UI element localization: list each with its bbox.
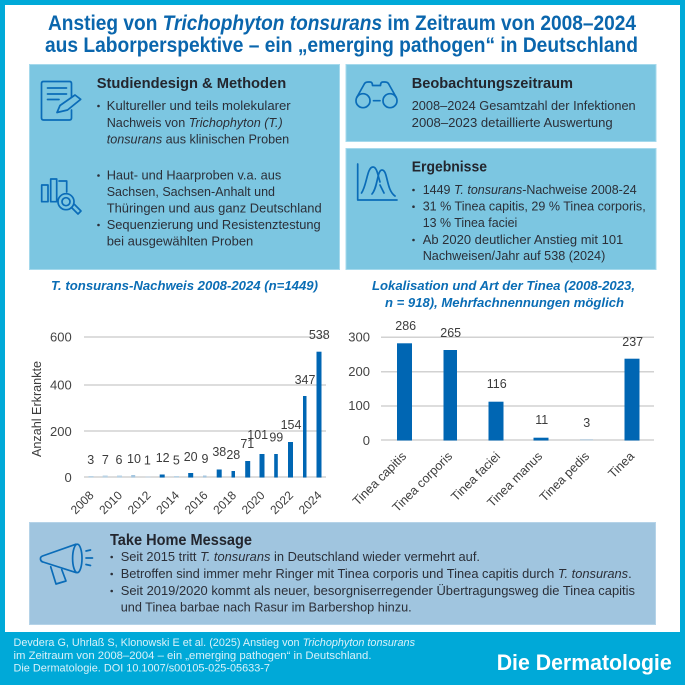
bar chart: yearly detections	[30, 328, 330, 517]
data labels: 101	[247, 428, 268, 442]
x axis labels: 2018	[210, 488, 239, 517]
x axis labels: Tinea	[605, 449, 637, 481]
text block: results list: Ab 2020 deutlicher Anstieg mit 101	[423, 232, 623, 247]
text block: methods list: Sequenzierung und Resistenztestung	[107, 217, 321, 232]
y axis labels: 0	[64, 470, 72, 485]
bars	[397, 343, 640, 440]
panel: Studiendesign und Methoden	[30, 64, 340, 270]
x axis labels: 2020	[239, 488, 268, 517]
data labels: 538	[309, 328, 330, 342]
data labels: 28	[226, 448, 240, 462]
heading: Studiendesign und Methoden: Studiendesign & Methoden	[97, 75, 286, 92]
data labels: 3	[583, 416, 590, 430]
data labels: 71	[240, 437, 254, 451]
chart title: Lokalisation und Art der Tinea	[372, 278, 635, 310]
bars	[88, 352, 322, 478]
icon: document with pencil	[42, 82, 81, 120]
x axis labels: 2010	[96, 488, 125, 517]
text block: results list: Nachweisen/Jahr auf 538 (2024)	[423, 248, 605, 263]
data labels: 9	[202, 452, 209, 466]
y axis labels: 300	[348, 330, 370, 345]
bar chart: tinea localisation	[348, 319, 654, 515]
y axis labels: 400	[50, 378, 72, 392]
icon: distribution curves	[358, 164, 397, 200]
icon: megaphone	[40, 544, 92, 584]
data labels: 286	[395, 319, 416, 333]
text block: key messages: Betroffen sind immer mehr Ringer mit Tinea corporis und Tinea capitis durch T. tonsurans.	[121, 566, 632, 581]
text block: key messages	[110, 549, 635, 615]
panel: Beobachtungszeitraum	[346, 64, 656, 142]
icon: binoculars	[356, 82, 397, 108]
text block: methods list: Kultureller und teils molekularer	[107, 98, 291, 113]
text block: results list: 1449 T. tonsurans-Nachweise 2008-24	[423, 182, 637, 197]
text block: methods list: tonsurans aus klinischen Proben	[107, 132, 289, 146]
text block: observation period: 2008–2024 Gesamtzahl der Infektionen	[412, 98, 636, 113]
panel: Take Home Message	[30, 522, 656, 624]
data labels	[395, 319, 643, 430]
x axis labels: 2008	[68, 488, 97, 517]
data labels: 20	[184, 450, 198, 464]
text block: methods list: Haut- und Haarproben v.a. aus	[107, 168, 282, 182]
y axis title: Anzahl Erkrankte	[30, 361, 44, 457]
data labels: 6	[116, 453, 123, 467]
x axis labels: 2014	[153, 488, 182, 517]
data labels: 12	[156, 451, 170, 465]
x axis labels: 2022	[267, 488, 296, 517]
icon: bar chart with magnifier	[42, 179, 81, 214]
y axis labels: 200	[348, 364, 370, 379]
text block: results list: 31 % Tinea capitis, 29 % Tinea corporis,	[423, 199, 646, 214]
citation: im Zeitraum von 2008–2004 – ein „emerging pathogen“ in Deutschland.	[14, 650, 372, 662]
y axis labels: 0	[363, 433, 370, 448]
y axis labels: 200	[50, 424, 72, 439]
text block: key messages: Seit 2019/2020 kommt als neuer, besorgniserregender Übertragungsweg die Tinea capitis	[121, 583, 635, 598]
chart title: T. tonsurans-Nachweis: T. tonsurans-Nachweis 2008-2024 (n=1449)	[51, 278, 318, 293]
x axis labels	[68, 488, 325, 517]
data labels: 265	[440, 326, 461, 340]
data labels: 1	[144, 454, 151, 468]
data labels: 7	[102, 453, 109, 467]
text block: key messages: und Tinea barbae nach Rasur im Barbershop hinzu.	[121, 600, 412, 615]
text block: methods list: Sachsen, Sachsen-Anhalt und	[107, 184, 275, 199]
text block: results list	[412, 182, 646, 263]
data labels: 3	[87, 453, 94, 467]
citation: Devdera G, Uhrlaß S, Klonowski E et al. (2025) Anstieg von Trichophyton tonsurans	[14, 637, 415, 649]
y axis labels: 600	[50, 330, 72, 345]
x axis labels: 2016	[182, 488, 211, 517]
text block: methods list: Thüringen und aus ganz Deutschland	[107, 200, 322, 216]
data labels: 5	[173, 454, 180, 468]
x axis labels: Tinea pedis	[537, 449, 592, 504]
x axis labels: 2024	[296, 488, 325, 517]
data labels: 116	[487, 377, 507, 391]
data labels: 237	[622, 335, 643, 349]
y axis labels	[50, 330, 72, 485]
text block: methods list	[97, 98, 322, 248]
data labels: 10	[127, 452, 141, 466]
title: Anstieg von Trichophyton tonsurans im Zeitraum von 2008–2024	[48, 12, 636, 35]
heading: Ergebnisse: Ergebnisse	[412, 159, 487, 176]
data labels	[87, 328, 330, 468]
y axis labels	[348, 330, 370, 448]
chart title: Lokalisation und Art der Tinea: Lokalisation und Art der Tinea (2008-2023,	[372, 278, 635, 293]
title	[45, 12, 638, 57]
journal name: Die Dermatologie	[497, 650, 672, 675]
x axis labels: Tinea manus	[484, 449, 545, 510]
text block: methods list: Nachweis von Trichophyton (T.)	[107, 115, 283, 130]
x axis labels: Tinea corporis	[390, 449, 455, 515]
x axis labels: Tinea faciei	[448, 449, 503, 504]
title: aus Laborperspektive – ein „emerging pathogen“ in Deutschland	[45, 34, 638, 57]
citation: Die Dermatologie. DOI 10.1007/s00105-025-05633-7	[14, 663, 270, 675]
data labels: 11	[535, 413, 548, 427]
text block: results list: 13 % Tinea faciei	[423, 215, 517, 230]
heading: Beobachtungszeitraum: Beobachtungszeitraum	[412, 75, 573, 92]
text block: methods list: bei ausgewählten Proben	[107, 234, 253, 248]
data labels: 154	[281, 418, 301, 432]
text block: observation period	[412, 98, 636, 130]
x axis labels: Tinea capitis	[350, 449, 409, 508]
panel: Ergebnisse	[346, 148, 656, 270]
text block: key messages: Seit 2015 tritt T. tonsurans in Deutschland wieder vermehrt auf.	[121, 549, 480, 564]
data labels: 347	[295, 373, 315, 387]
heading: Take Home Message: Take Home Message	[110, 532, 252, 549]
x axis labels	[350, 449, 637, 515]
chart title: Lokalisation und Art der Tinea: n = 918), Mehrfachnennungen möglich	[385, 295, 624, 310]
text block: observation period: 2008–2023 detaillierte Auswertung	[412, 115, 613, 130]
y axis labels: 100	[348, 398, 370, 413]
citation	[14, 637, 415, 675]
data labels: 38	[212, 445, 226, 459]
data labels: 99	[269, 431, 283, 445]
x axis labels: 2012	[125, 488, 154, 517]
